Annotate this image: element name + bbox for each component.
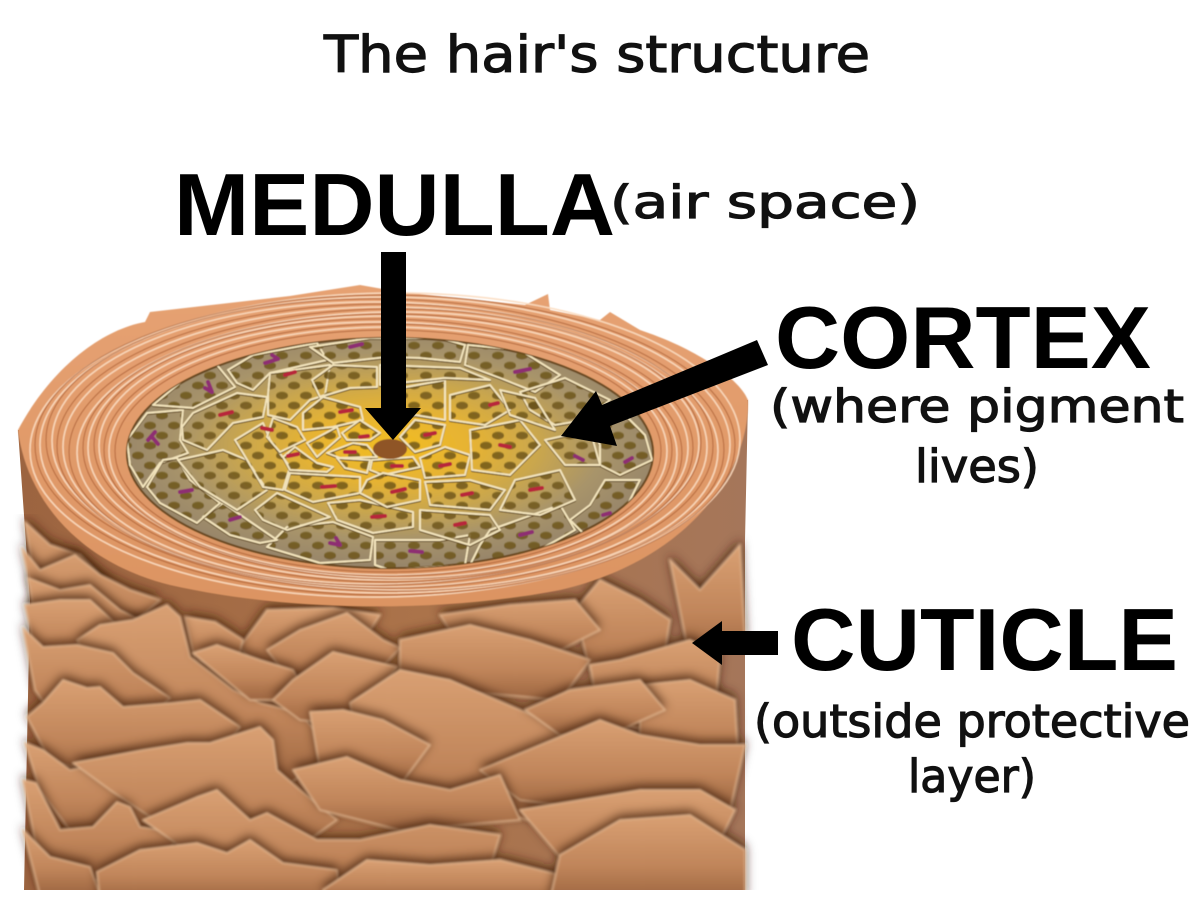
red pigment xyxy=(220,372,542,525)
label: cuticle: (outside protective xyxy=(754,695,1190,748)
illustration: hair shaft cross-section xyxy=(18,285,748,900)
magenta pigment xyxy=(148,344,632,552)
label: cortex xyxy=(770,288,1184,493)
label: medulla xyxy=(174,155,920,254)
medulla centre xyxy=(373,439,407,459)
title: The hair's structure xyxy=(323,26,870,85)
label: cortex: CORTEX xyxy=(775,288,1151,387)
cuticle body with overlapping scales xyxy=(18,400,748,900)
label: cuticle: layer) xyxy=(908,750,1036,803)
label: cortex: lives) xyxy=(915,440,1039,493)
label: cuticle xyxy=(754,590,1190,803)
arrow: cortex xyxy=(561,340,768,446)
label: medulla: (air space) xyxy=(610,176,920,229)
outer cuticle rim xyxy=(18,285,748,606)
label: medulla: MEDULLA xyxy=(174,155,615,254)
label: cortex: (where pigment xyxy=(770,380,1184,433)
cortex cells xyxy=(127,338,652,570)
cortex xyxy=(127,338,653,570)
label: cuticle: CUTICLE xyxy=(791,590,1178,689)
arrow: medulla xyxy=(365,252,421,440)
arrow: cuticle xyxy=(692,621,778,665)
